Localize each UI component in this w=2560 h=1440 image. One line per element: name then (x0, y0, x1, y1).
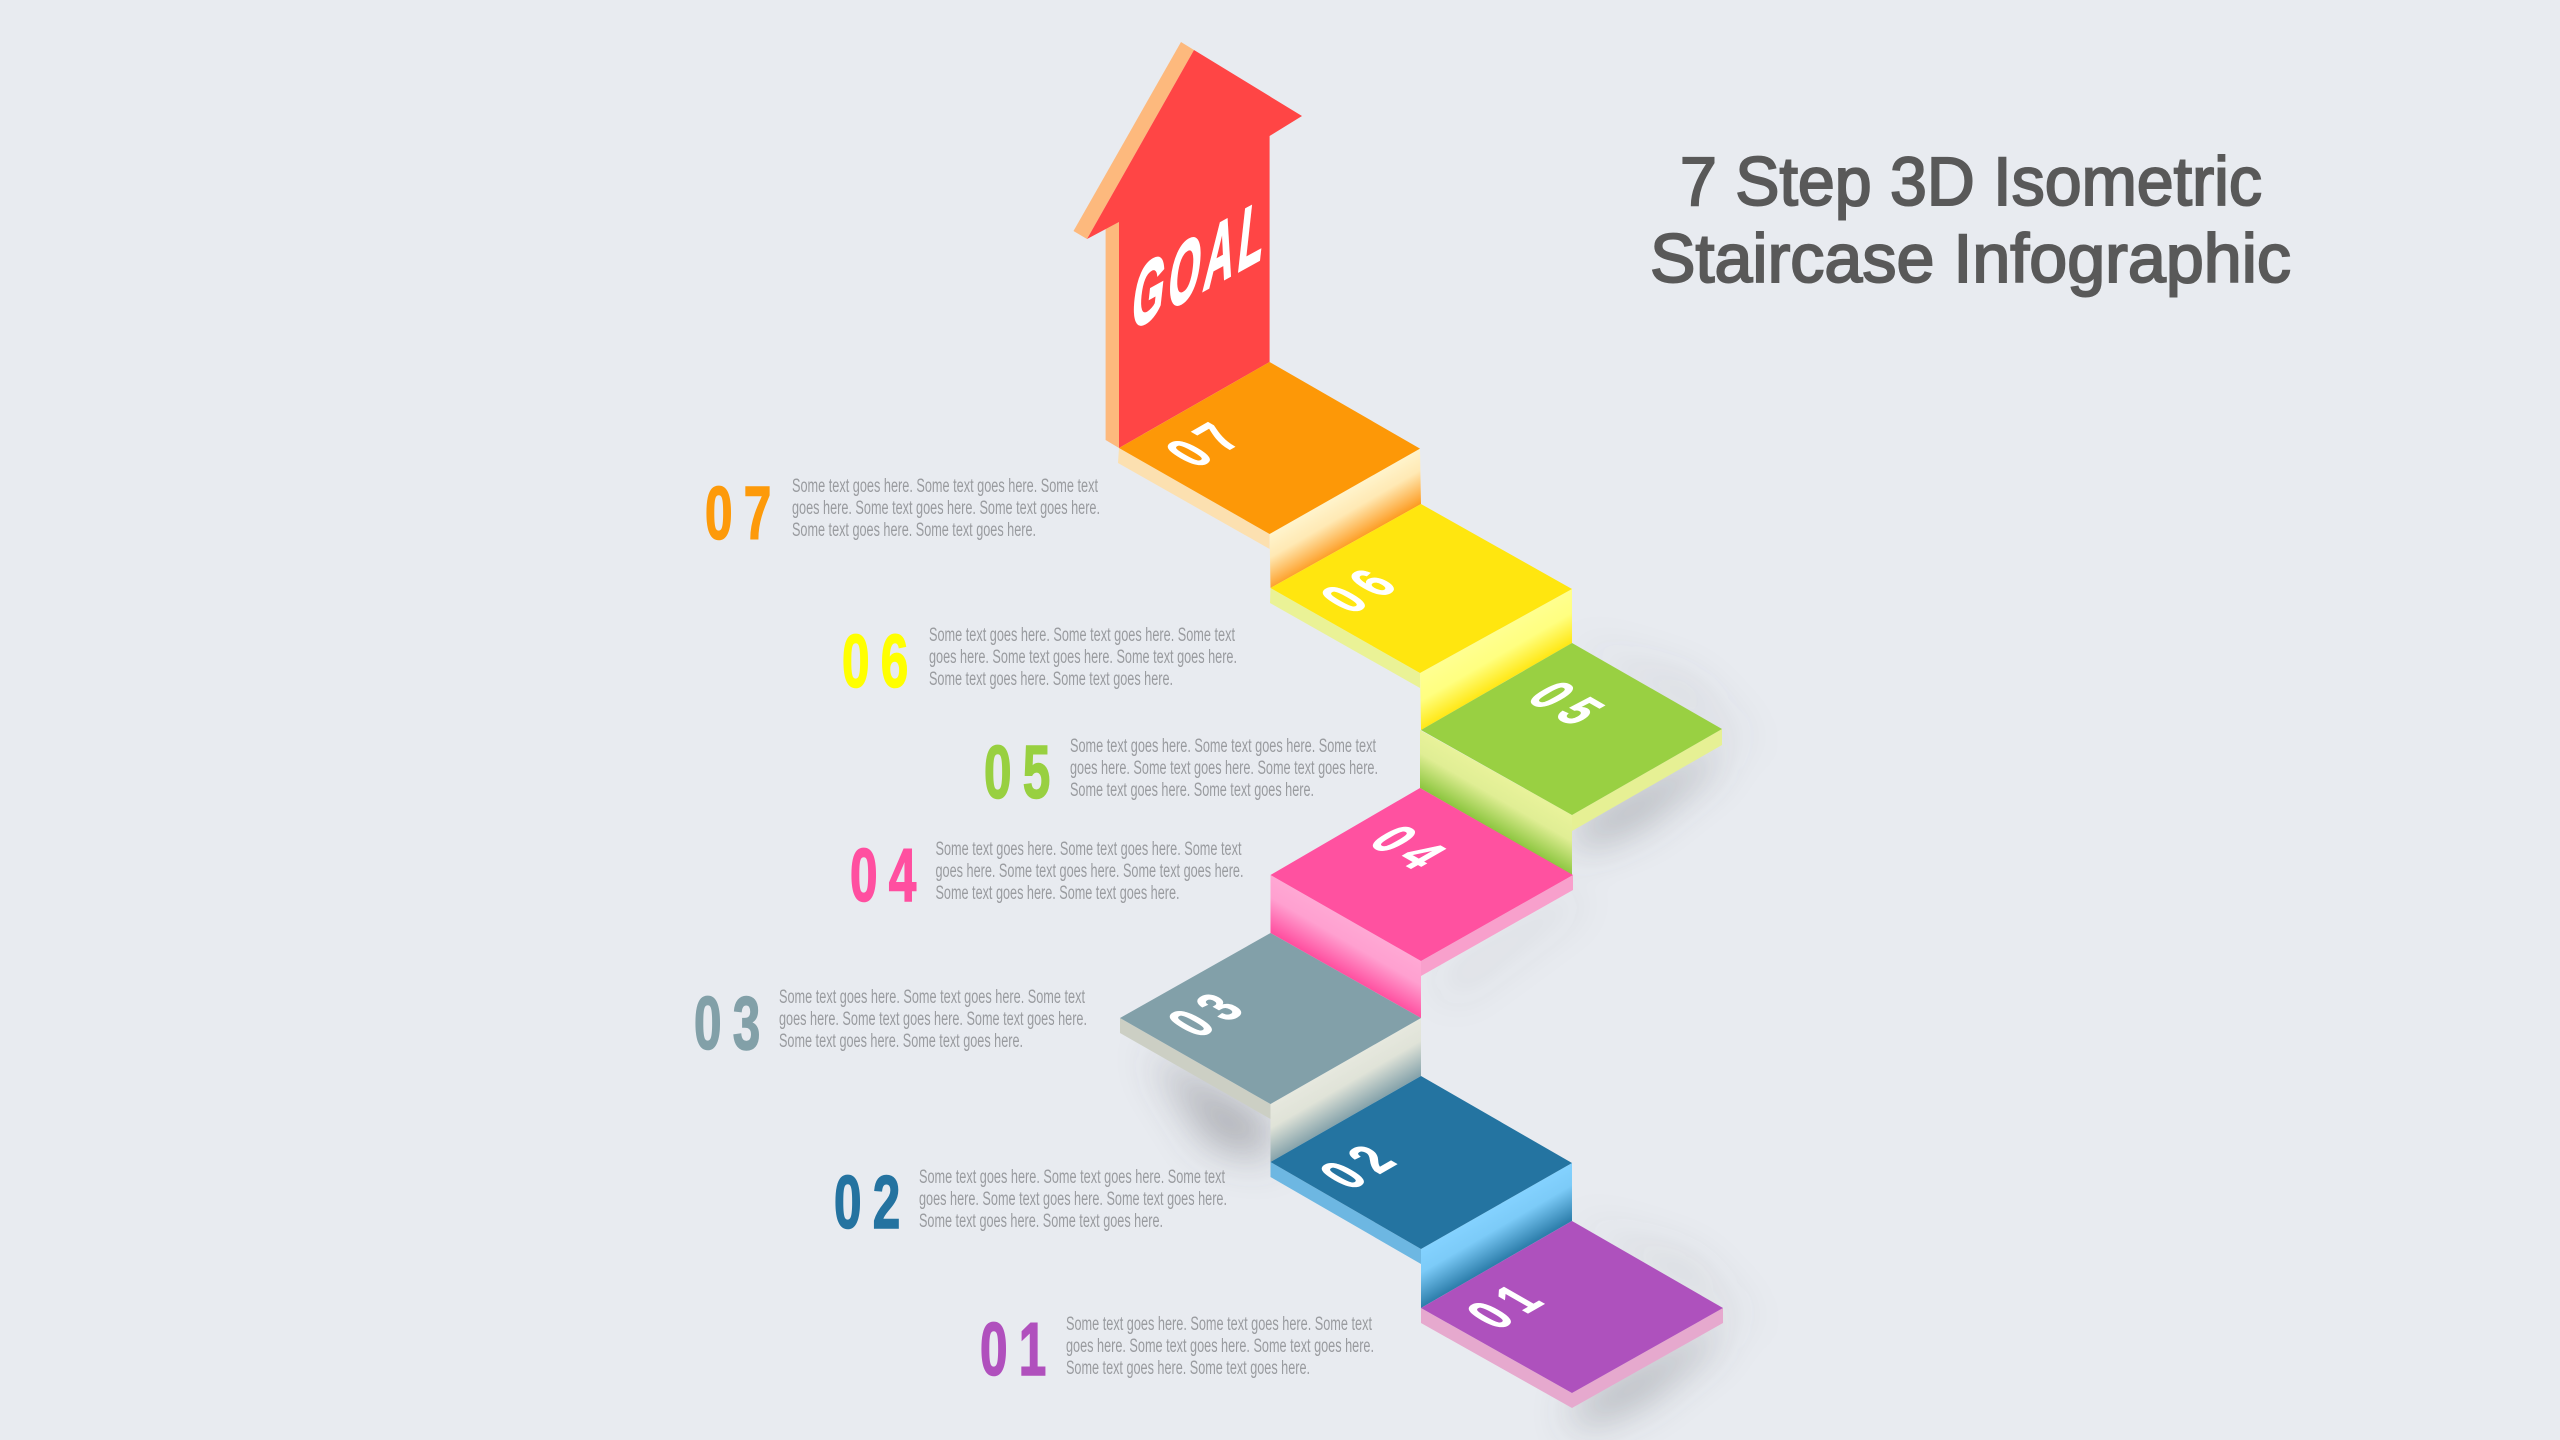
description 06: Some text goes here. Some text goes here. Some text (929, 624, 1235, 646)
description 03: goes here. Some text goes here. Some text goes here. (779, 1008, 1087, 1030)
number 04: 04 (850, 834, 927, 918)
text block 05 (984, 731, 1378, 815)
step 6 riser (1420, 589, 1572, 730)
step 2 riser (1421, 1163, 1572, 1308)
description 06 (929, 624, 1237, 690)
step 7 top (1119, 362, 1420, 534)
arrow shaft side face (1106, 222, 1119, 448)
step 4 (1270, 788, 1573, 1018)
description 03 (779, 986, 1087, 1052)
goal label: GOAL (1128, 177, 1274, 351)
description 02: goes here. Some text goes here. Some text goes here. (919, 1188, 1227, 1210)
goal arrow (1074, 42, 1302, 448)
description 05 (1070, 735, 1378, 801)
description 04: Some text goes here. Some text goes here. Some text (936, 838, 1242, 860)
step 1 (1421, 1221, 1723, 1408)
number 03: 03 (694, 982, 771, 1066)
step 1 top (1421, 1221, 1723, 1393)
soft shadows under steps (1150, 643, 1760, 1425)
step 2 (1270, 1076, 1572, 1308)
step 3 riser (1270, 1018, 1421, 1162)
step 5 riser (1420, 730, 1572, 875)
text block 06 (842, 620, 1237, 704)
step 2 top (1270, 1076, 1572, 1249)
step 5 (1420, 643, 1722, 875)
text block 04 (850, 834, 1244, 918)
description 07: Some text goes here. Some text goes here. (792, 519, 1036, 541)
text block 07 (705, 472, 1100, 556)
step 7 side (1118, 448, 1270, 549)
text block 02 (834, 1161, 1227, 1245)
step 2 label: 02 (1305, 1133, 1418, 1197)
description 01: goes here. Some text goes here. Some text goes here. (1066, 1335, 1374, 1357)
text block 01 (980, 1308, 1374, 1392)
text block 03 (694, 982, 1087, 1066)
number 02: 02 (834, 1161, 911, 1245)
description 02: Some text goes here. Some text goes here. (919, 1210, 1163, 1232)
description 05: Some text goes here. Some text goes here. (1070, 779, 1314, 801)
step 7 (1118, 362, 1421, 588)
number 05: 05 (984, 731, 1061, 815)
number 06: 06 (842, 620, 919, 704)
step 5 label: 05 (1514, 673, 1626, 738)
step 4 riser (1270, 875, 1421, 1018)
arrow front face (1087, 50, 1302, 448)
number 07: 07 (705, 472, 782, 556)
description 07: Some text goes here. Some text goes here. Some text (792, 475, 1098, 497)
step 5 top (1421, 643, 1722, 815)
description 01 (1066, 1313, 1374, 1379)
description 04 (936, 838, 1244, 904)
description 04: Some text goes here. Some text goes here. (936, 882, 1180, 904)
step 7 riser (1270, 449, 1421, 588)
step 4 top (1270, 788, 1573, 961)
description 04: goes here. Some text goes here. Some text goes here. (936, 860, 1244, 882)
step 3 side (1120, 1018, 1270, 1119)
description 06: Some text goes here. Some text goes here. (929, 668, 1173, 690)
step 6 (1270, 504, 1572, 730)
step 1 label: 01 (1452, 1273, 1565, 1337)
description 07: goes here. Some text goes here. Some text goes here. (792, 497, 1100, 519)
description 02: Some text goes here. Some text goes here. Some text (919, 1166, 1225, 1188)
step 6 side (1270, 588, 1420, 688)
step 5 right side (1572, 729, 1722, 831)
description 01: Some text goes here. Some text goes here. (1066, 1357, 1310, 1379)
description 06: goes here. Some text goes here. Some text goes here. (929, 646, 1237, 668)
description 03: Some text goes here. Some text goes here. Some text (779, 986, 1085, 1008)
description 01: Some text goes here. Some text goes here. Some text (1066, 1313, 1372, 1335)
step 2 side (1270, 1162, 1421, 1264)
step 3 top (1120, 933, 1421, 1104)
description 03: Some text goes here. Some text goes here. (779, 1030, 1023, 1052)
arrow side face (1074, 42, 1194, 239)
step 4 right side (1421, 875, 1573, 976)
number 01: 01 (980, 1308, 1057, 1392)
step 1 side (1421, 1308, 1723, 1408)
step 7 label: 07 (1151, 411, 1264, 475)
title: 7 Step 3D Isometric (1680, 143, 2262, 220)
step 6 top (1270, 504, 1572, 673)
title (1650, 143, 2291, 297)
step 3 (1120, 933, 1421, 1162)
description 07 (792, 475, 1100, 541)
step 3 label: 03 (1153, 981, 1266, 1045)
description 05: goes here. Some text goes here. Some text goes here. (1070, 757, 1378, 779)
description 05: Some text goes here. Some text goes here. Some text (1070, 735, 1376, 757)
step 6 label: 06 (1306, 557, 1419, 621)
title: Staircase Infographic (1650, 220, 2291, 297)
step 4 label: 04 (1356, 817, 1468, 882)
description 02 (919, 1166, 1227, 1232)
